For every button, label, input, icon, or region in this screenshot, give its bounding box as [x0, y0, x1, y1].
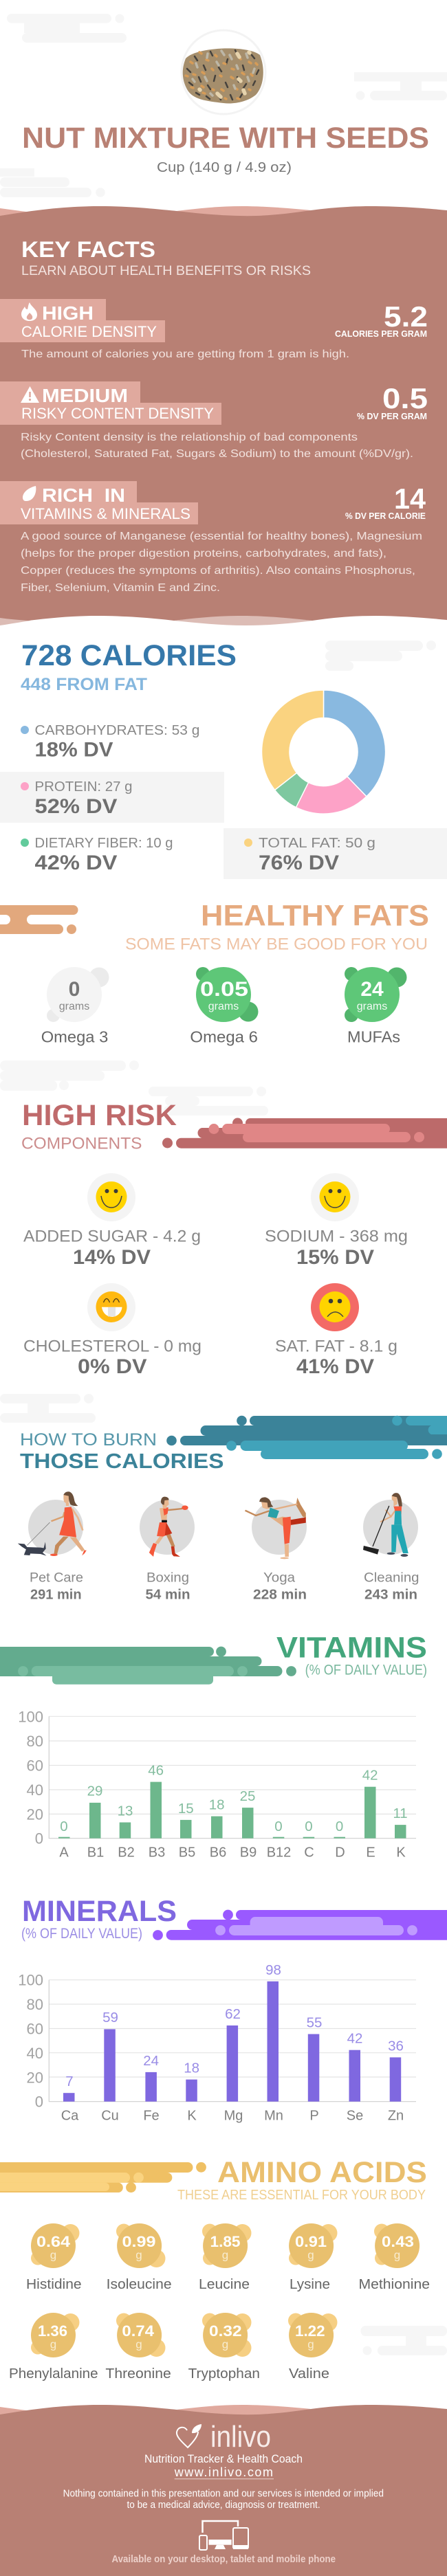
- decorative bars: [162, 1118, 447, 1148]
- heading: MINERALS: [22, 1895, 177, 1928]
- phenylalanine: Phenylalanine: [9, 2366, 98, 2381]
- bar chart: vitamins: 40: [27, 1781, 43, 1799]
- decorative bar: [0, 905, 78, 934]
- unit: % DV PER CALORIE: [345, 511, 426, 521]
- label: high: HIGH: [42, 302, 94, 324]
- label: vitamins and minerals: VITAMINS & MINERALS: [21, 505, 190, 522]
- valine: Valine: [289, 2366, 329, 2381]
- heading: HEALTHY FATS: [201, 900, 429, 933]
- histidine: 0.64: [36, 2233, 71, 2250]
- label: yoga: [253, 1571, 307, 1603]
- phenylalanine: 1.36: [38, 2322, 67, 2340]
- legend: dietary fiber: 42% DV: [34, 852, 117, 874]
- label: boxing: [146, 1571, 190, 1603]
- risk: added sugar: 14% DV: [73, 1246, 151, 1269]
- panel: high risk: [0, 1061, 447, 1378]
- lysine: Lysine: [290, 2277, 330, 2292]
- tryptophan: [188, 2313, 260, 2381]
- threonine: 0.74: [122, 2322, 155, 2340]
- heading: 728 calories: 728 CALORIES: [21, 639, 237, 672]
- omega 6: grams: [208, 1001, 239, 1012]
- risk: added sugar: ADDED SUGAR - 4.2 g: [23, 1228, 201, 1246]
- tryptophan: 0.32: [209, 2322, 242, 2340]
- bar chart: minerals: 62: [225, 2006, 241, 2022]
- description: Risky Content density is the relationship of bad components: [21, 432, 358, 443]
- mufas: 24: [360, 978, 384, 1001]
- methionine: [359, 2223, 430, 2292]
- description: The amount of calories you are getting from 1 gram is high.: [21, 348, 349, 360]
- label: calorie density: CALORIE DENSITY: [21, 323, 157, 340]
- bar chart: vitamins: 11: [393, 1806, 408, 1821]
- activity: cleaning: [363, 1493, 418, 1557]
- bar chart: vitamins: 80: [27, 1733, 43, 1750]
- panel: footer: [0, 2405, 447, 2576]
- bar chart: minerals: 100: [18, 1972, 43, 1989]
- panel: amino acids: [0, 2156, 447, 2381]
- description: [21, 432, 413, 460]
- isoleucine: g: [135, 2249, 142, 2262]
- label: boxing: Boxing: [146, 1571, 189, 1586]
- bar chart: minerals: 60: [27, 2021, 43, 2037]
- methionine: g: [394, 2249, 400, 2262]
- histidine: g: [50, 2249, 56, 2262]
- bar chart: minerals: Fe: [143, 2109, 160, 2124]
- header clouds: [0, 14, 447, 197]
- label: pet care: Pet Care: [30, 1571, 83, 1586]
- unit: CALORIES PER GRAM: [335, 329, 427, 339]
- bar chart: vitamins: 20: [27, 1806, 43, 1823]
- bar chart: minerals: P: [309, 2109, 319, 2124]
- disclaimer: to be a medical advice, diagnosis or treatment.: [127, 2499, 320, 2511]
- bar chart: vitamins: 0: [305, 1819, 313, 1834]
- unit: % DV PER GRAM: [357, 411, 427, 421]
- leucine: 1.85: [210, 2233, 241, 2250]
- fact: rich in vitamins and minerals: [0, 481, 426, 594]
- food image in circle: [182, 30, 265, 114]
- label: yoga: 228 min: [253, 1588, 307, 1603]
- bar chart: vitamins: D: [335, 1845, 345, 1861]
- label: pet care: 291 min: [30, 1588, 82, 1603]
- icon: leaf: [23, 486, 36, 501]
- bar chart: vitamins: B12: [267, 1845, 291, 1861]
- lysine: 0.91: [295, 2233, 327, 2250]
- methionine: 0.43: [382, 2233, 414, 2250]
- donut chart: [262, 690, 386, 814]
- bar chart: minerals: 36: [388, 2038, 404, 2054]
- methionine: Methionine: [359, 2277, 430, 2292]
- panel: minerals: [18, 1895, 447, 2124]
- bar chart: vitamins: B3: [149, 1845, 165, 1861]
- heading line 2: THOSE CALORIES: [20, 1449, 224, 1473]
- heading: VITAMINS: [276, 1632, 427, 1665]
- omega 3: grams: [59, 1001, 89, 1012]
- label: cleaning: Cleaning: [364, 1571, 419, 1586]
- leucine: Leucine: [199, 2277, 250, 2292]
- bar chart: minerals: 40: [27, 2045, 43, 2062]
- availability note: Available on your desktop, tablet and mobile phone: [111, 2553, 336, 2565]
- legend: dietary fiber: [21, 836, 173, 874]
- bar chart: minerals: Ca: [61, 2109, 79, 2124]
- tryptophan: g: [222, 2338, 228, 2351]
- panel: healthy fats: [0, 900, 429, 1046]
- bar chart: minerals: Zn: [388, 2109, 404, 2124]
- bar chart: vitamins: 29: [87, 1784, 102, 1799]
- bar chart: vitamins: 25: [240, 1788, 255, 1804]
- bar chart: vitamins: 0: [336, 1819, 343, 1834]
- value: 0.5: 0.5: [382, 382, 428, 414]
- bar chart: minerals: Cu: [101, 2109, 119, 2124]
- description: [21, 531, 422, 594]
- description: A good source of Manganese (essential for healthy bones), Magnesium: [21, 531, 422, 542]
- bar chart: minerals: 98: [265, 1962, 281, 1978]
- bar chart: vitamins: K: [396, 1845, 406, 1861]
- disclaimer: [63, 2488, 384, 2511]
- isoleucine: 0.99: [122, 2233, 155, 2250]
- bar chart: vitamins: B1: [87, 1845, 104, 1861]
- subheading: (% OF DAILY VALUE): [305, 1663, 427, 1678]
- leucine: [199, 2223, 252, 2292]
- risk: cholesterol: CHOLESTEROL - 0 mg: [23, 1337, 201, 1356]
- bar chart: minerals: Mn: [264, 2109, 283, 2124]
- panel: how to burn those calories: [0, 1394, 447, 1603]
- phenylalanine: [9, 2313, 98, 2381]
- panel: vitamins: [0, 1632, 427, 1861]
- description: Fiber, Selenium, Vitamin E and Zinc.: [21, 582, 220, 594]
- isoleucine: [107, 2223, 172, 2292]
- valine: g: [307, 2338, 314, 2351]
- label: boxing: 54 min: [146, 1588, 190, 1603]
- bar chart: vitamins: 100: [18, 1709, 43, 1725]
- activity: pet care: [18, 1491, 87, 1556]
- valine: [288, 2313, 337, 2381]
- fact: calorie density: [0, 299, 428, 360]
- bar chart: minerals: 7: [65, 2074, 74, 2089]
- risk: cholesterol: 0% DV: [78, 1355, 147, 1378]
- bar chart: vitamins: B5: [179, 1845, 195, 1861]
- bar chart: vitamins: B9: [240, 1845, 257, 1861]
- bar chart: vitamins: C: [304, 1845, 314, 1861]
- legend: total fat: 76% DV: [259, 852, 339, 874]
- legend: total fat: TOTAL FAT: 50 g: [259, 836, 375, 851]
- bar chart: minerals: K: [187, 2109, 197, 2124]
- risk: saturated fat: SAT. FAT - 8.1 g: [275, 1337, 397, 1356]
- heading line 1: HOW TO BURN: [20, 1430, 157, 1450]
- heading: HIGH RISK: [22, 1099, 177, 1132]
- panel: calories: [0, 639, 447, 879]
- logo: inlivo: [210, 2420, 271, 2454]
- subheading: COMPONENTS: [21, 1135, 142, 1153]
- bar chart: vitamins: 0: [60, 1819, 68, 1834]
- mufas: grams: [357, 1001, 387, 1012]
- decorative bars: [0, 2162, 206, 2192]
- bar chart: vitamins: 0: [274, 1819, 283, 1834]
- serving size: Cup (140 g / 4.9 oz): [157, 160, 292, 175]
- bar chart: vitamins: A: [59, 1845, 69, 1861]
- icon: devices: [199, 2521, 248, 2550]
- histidine: [26, 2223, 82, 2292]
- bar chart: minerals: [18, 1962, 416, 2124]
- bar chart: minerals: Se: [347, 2109, 363, 2124]
- omega 6: [190, 967, 259, 1046]
- legend: carbohydrates: 18% DV: [34, 738, 113, 762]
- subheading: THESE ARE ESSENTIAL FOR YOUR BODY: [177, 2188, 426, 2203]
- subheading: LEARN ABOUT HEALTH BENEFITS OR RISKS: [21, 263, 311, 278]
- tryptophan: Tryptophan: [188, 2366, 260, 2381]
- omega 3: 0: [69, 978, 80, 1001]
- mufas: MUFAs: [347, 1028, 400, 1046]
- activity: boxing: [140, 1497, 195, 1557]
- bar chart: vitamins: B2: [118, 1845, 135, 1861]
- activity: yoga: [245, 1497, 307, 1559]
- bar chart: vitamins: 0: [35, 1830, 43, 1847]
- bar chart: vitamins: E: [366, 1845, 375, 1861]
- threonine: g: [135, 2338, 142, 2351]
- histidine: Histidine: [26, 2277, 82, 2292]
- description: (Cholesterol, Saturated Fat, Sugars & Sodium) to the amount (%DV/gr).: [21, 448, 413, 460]
- icon: flame: [21, 302, 37, 321]
- omega 6: Omega 6: [190, 1028, 258, 1046]
- risk: saturated fat: 41% DV: [296, 1355, 374, 1378]
- bar chart: minerals: 0: [35, 2094, 43, 2111]
- heading: key facts: KEY FACTS: [21, 237, 155, 262]
- heading: AMINO ACIDS: [217, 2156, 427, 2189]
- label: pet care: [30, 1571, 83, 1603]
- omega 6: 0.05: [200, 978, 248, 1001]
- title: NUT MIXTURE WITH SEEDS: [22, 122, 429, 155]
- omega 3: Omega 3: [41, 1028, 108, 1046]
- mufas: [345, 967, 407, 1046]
- legend: protein: [0, 772, 224, 823]
- website link: www.inlivo.com: [174, 2465, 273, 2479]
- bar chart: minerals: 42: [347, 2031, 362, 2047]
- icon: warning triangle: [21, 386, 39, 403]
- isoleucine: Isoleucine: [107, 2277, 172, 2292]
- subheading: from fat: 448 FROM FAT: [21, 675, 147, 694]
- decorative bars: [153, 1910, 447, 1940]
- label: cleaning: [364, 1571, 419, 1603]
- bar chart: vitamins: 46: [148, 1763, 164, 1779]
- label: yoga: Yoga: [263, 1571, 295, 1586]
- bar chart: vitamins: 13: [118, 1803, 133, 1819]
- description: (helps for the proper digestion proteins, carbohydrates, and fats),: [21, 548, 386, 559]
- description: Copper (reduces the symptoms of arthritis). Also contains Phosphorus,: [21, 565, 415, 577]
- lysine: [289, 2223, 337, 2292]
- risk: saturated fat: [275, 1283, 397, 1378]
- bar chart: vitamins: 60: [27, 1757, 43, 1775]
- legend: dietary fiber: DIETARY FIBER: 10 g: [34, 836, 173, 851]
- bar chart: minerals: 18: [184, 2061, 199, 2076]
- legend: carbohydrates: [21, 723, 199, 762]
- legend: protein: 52% DV: [34, 795, 117, 818]
- logo: [177, 2420, 271, 2454]
- valine: 1.22: [295, 2322, 325, 2340]
- bar chart: minerals: 24: [143, 2053, 159, 2069]
- bar chart: minerals: 80: [27, 1996, 43, 2013]
- risk: added sugar: [23, 1173, 201, 1269]
- risk: sodium: SODIUM - 368 mg: [265, 1228, 408, 1246]
- bar chart: vitamins: [18, 1709, 416, 1861]
- legend: carbohydrates: CARBOHYDRATES: 53 g: [34, 723, 199, 738]
- label: medium: MEDIUM: [42, 385, 128, 406]
- bar chart: minerals: 20: [27, 2069, 43, 2087]
- threonine: Threonine: [105, 2366, 171, 2381]
- value: 5.2: 5.2: [384, 300, 428, 333]
- label: risky content density: RISKY CONTENT DENSITY: [21, 405, 214, 422]
- tagline: Nutrition Tracker & Health Coach: [144, 2452, 303, 2465]
- bar chart: minerals: 59: [102, 2010, 118, 2025]
- disclaimer: Nothing contained in this presentation and our services is intended or implied: [63, 2488, 384, 2500]
- leucine: g: [222, 2249, 228, 2262]
- lysine: g: [307, 2249, 314, 2262]
- decorative bars: [0, 1647, 296, 1685]
- threonine: [105, 2313, 171, 2381]
- omega 3: [41, 967, 109, 1046]
- panel: key facts: [0, 206, 447, 625]
- bar chart: minerals: 55: [307, 2015, 322, 2030]
- bar chart: vitamins: B6: [210, 1845, 226, 1861]
- risk: sodium: 15% DV: [296, 1246, 374, 1269]
- label: cleaning: 243 min: [364, 1588, 417, 1603]
- subheading: SOME FATS MAY BE GOOD FOR YOU: [125, 935, 428, 954]
- bar chart: vitamins: 42: [362, 1768, 378, 1784]
- value: 14: 14: [394, 482, 426, 515]
- phenylalanine: g: [50, 2338, 56, 2351]
- bar chart: vitamins: 15: [178, 1801, 194, 1817]
- subheading: (% OF DAILY VALUE): [21, 1926, 142, 1942]
- risk: cholesterol: [23, 1283, 201, 1378]
- decorative bars: [166, 1416, 447, 1459]
- bar chart: minerals: Mg: [224, 2109, 243, 2124]
- bar chart: vitamins: 18: [209, 1797, 225, 1813]
- fact: risky content density: [0, 381, 428, 460]
- legend: protein: PROTEIN: 27 g: [34, 779, 132, 795]
- legend: total fat: [224, 828, 447, 879]
- label: rich in: RICH IN: [42, 485, 125, 506]
- risk: sodium: [265, 1173, 408, 1269]
